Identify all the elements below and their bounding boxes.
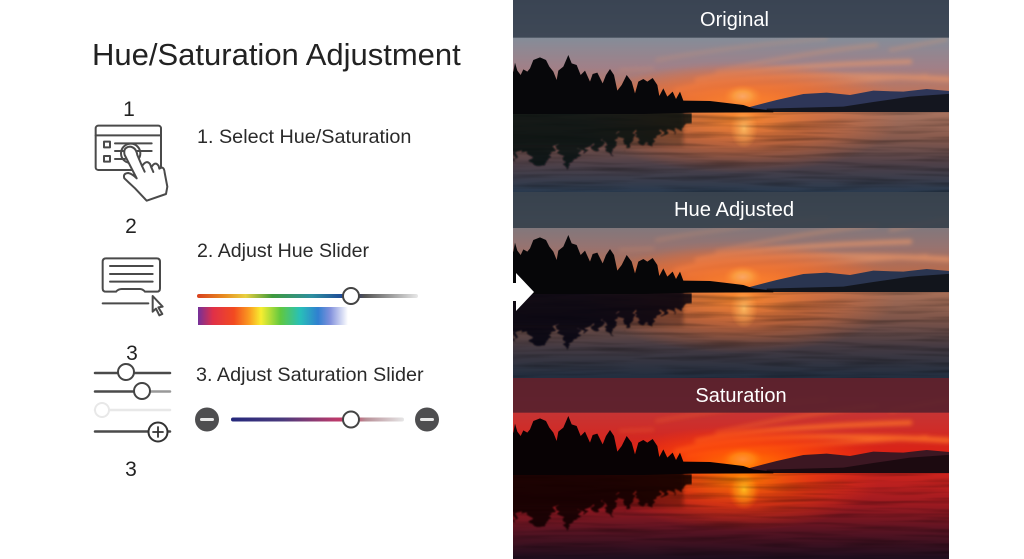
icon: card with tapping hand — [96, 126, 167, 201]
arrow — [513, 273, 534, 311]
title: Hue/Saturation Adjustment — [92, 37, 461, 72]
bottom number: 3 — [125, 458, 137, 481]
step 3 number: 3 — [126, 342, 138, 365]
hue slider — [197, 288, 418, 304]
step 2 label: 2. Adjust Hue Slider — [197, 240, 370, 262]
step 1 label: 1. Select Hue/Saturation — [197, 126, 411, 148]
saturation slider — [195, 408, 439, 432]
step 2 number: 2 — [125, 215, 137, 238]
step 1 number: 1 — [123, 98, 135, 121]
icon: slider stack — [95, 364, 170, 442]
icon: text panel with cursor — [103, 258, 163, 315]
panel: original photo — [510, 0, 957, 212]
step 3 label: 3. Adjust Saturation Slider — [196, 364, 424, 386]
label: Original: Original — [700, 9, 769, 31]
panel: saturation photo — [510, 328, 957, 559]
panel: hue adjusted photo — [510, 147, 957, 392]
hue spectrum bar — [198, 307, 348, 325]
label: Hue Adjusted: Hue Adjusted — [674, 199, 794, 221]
label: Saturation: Saturation — [695, 385, 787, 407]
